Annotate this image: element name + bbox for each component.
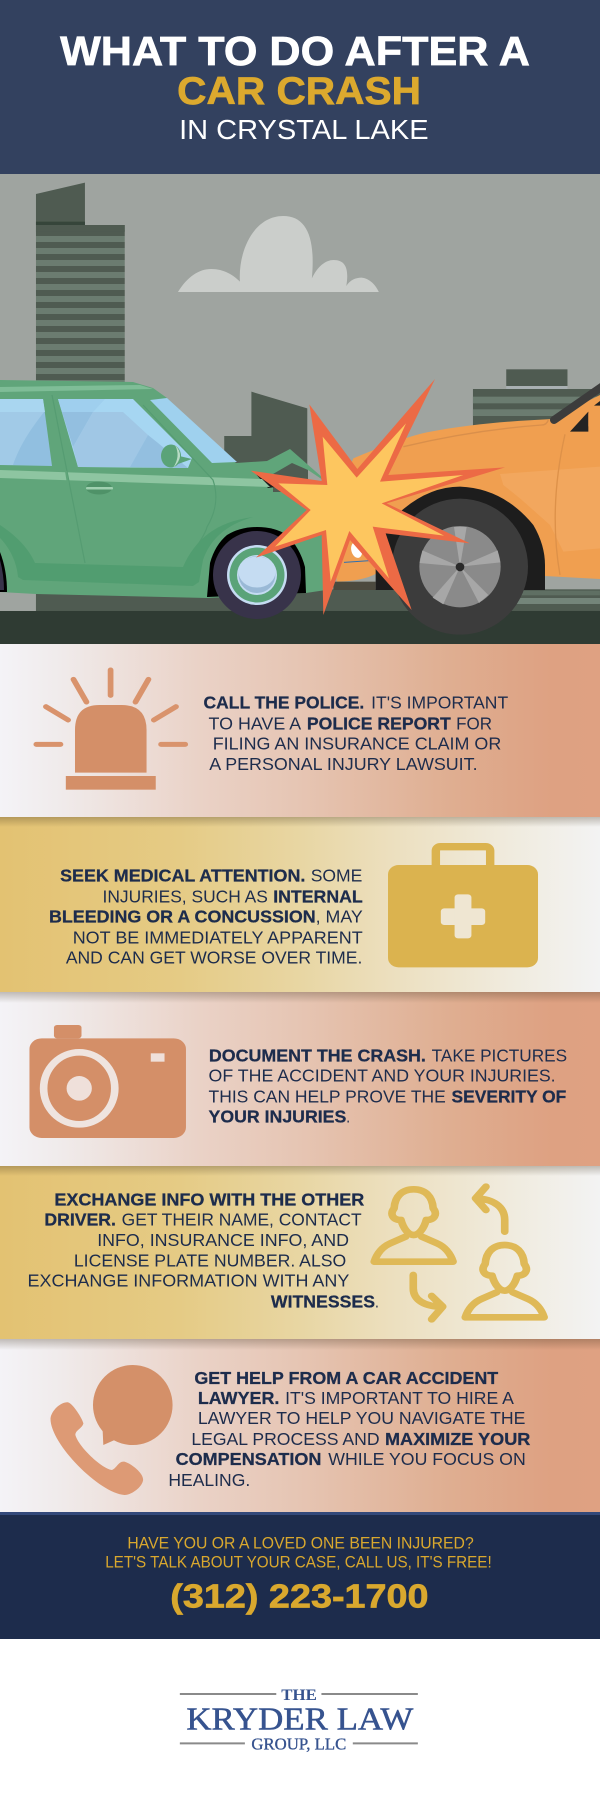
text: seek medical attention: INJURIES, SUCH AS <box>103 887 268 906</box>
green car windows <box>0 398 237 468</box>
text: call the police: IT'S IMPORTANT <box>371 693 508 712</box>
icon: first aid kit <box>388 847 538 967</box>
text: exchange info: EXCHANGE INFO WITH THE OTHER <box>54 1190 365 1209</box>
text: document the crash <box>209 1046 567 1126</box>
text: get help from a lawyer: COMPENSATION <box>176 1449 321 1469</box>
text: call the police: POLICE REPORT <box>307 714 451 733</box>
text: exchange info: INFO, INSURANCE INFO, AND <box>97 1230 349 1250</box>
logo: GROUP, LLC <box>251 1734 346 1753</box>
panel: document the crash <box>0 992 600 1166</box>
panel: seek medical attention <box>0 817 600 992</box>
crash illustration <box>0 174 600 644</box>
text: document the crash: YOUR INJURIES <box>209 1107 346 1126</box>
header panel <box>0 0 600 174</box>
text: exchange info: WITNESSES <box>271 1292 375 1311</box>
text: get help from a lawyer: HEALING. <box>168 1470 250 1490</box>
wheel: green car <box>213 531 301 619</box>
text: document the crash: . <box>346 1107 350 1126</box>
text: document the crash: DOCUMENT THE CRASH. <box>209 1046 426 1065</box>
text: exchange info: DRIVER. <box>44 1210 116 1229</box>
road <box>0 611 600 644</box>
footer call to action <box>0 1512 600 1639</box>
text: seek medical attention: SEEK MEDICAL ATTENTION. <box>60 866 305 885</box>
text: get help from a lawyer: LEGAL PROCESS AND <box>191 1429 380 1449</box>
text: exchange info: GET THEIR NAME, CONTACT <box>122 1210 362 1229</box>
wheel: orange car <box>392 499 528 635</box>
text: get help from a lawyer: GET HELP FROM A CAR ACCIDENT <box>194 1368 499 1388</box>
icon: two people exchanging <box>374 1187 544 1319</box>
green car door handle <box>86 482 113 494</box>
text: document the crash: OF THE ACCIDENT AND YOUR INJURIES. <box>209 1066 556 1085</box>
call to action text <box>105 1533 492 1571</box>
text: document the crash: THIS CAN HELP PROVE THE <box>209 1087 446 1106</box>
panel: call the police <box>0 644 600 817</box>
call to action text: HAVE YOU OR A LOVED ONE BEEN INJURED? <box>127 1533 474 1552</box>
icon: phone and speech bubble <box>51 1365 173 1495</box>
text: get help from a lawyer: WHILE YOU FOCUS ON <box>328 1449 526 1469</box>
text: get help from a lawyer: LAWYER. <box>198 1388 279 1408</box>
text: exchange info: . <box>375 1292 379 1311</box>
call to action text: LET'S TALK ABOUT YOUR CASE, CALL US, IT'S FREE! <box>105 1552 492 1571</box>
car: orange <box>333 386 600 635</box>
icon: siren <box>36 670 185 790</box>
text: seek medical attention: , MAY <box>316 907 363 926</box>
building centre <box>224 392 308 464</box>
title: IN CRYSTAL LAKE <box>179 115 429 146</box>
text: call the police: CALL THE POLICE. <box>204 693 364 712</box>
title: WHAT TO DO AFTER A <box>60 30 530 74</box>
text: get help from a lawyer <box>168 1368 531 1490</box>
logo <box>180 1686 418 1753</box>
text: get help from a lawyer: MAXIMIZE YOUR <box>385 1429 531 1449</box>
text: call the police: TO HAVE A <box>209 714 302 733</box>
green car belt line <box>0 470 270 487</box>
text: seek medical attention: SOME <box>311 866 362 885</box>
text: call the police: FOR <box>456 714 492 733</box>
title <box>60 30 530 146</box>
text: get help from a lawyer: LAWYER TO HELP YOU NAVIGATE THE <box>198 1408 525 1428</box>
text: seek medical attention: INTERNAL <box>273 887 363 906</box>
building right <box>473 369 600 429</box>
car: green <box>0 380 326 619</box>
text: exchange info: EXCHANGE INFORMATION WITH ANY <box>28 1271 350 1290</box>
text: seek medical attention: AND CAN GET WORSE OVER TIME. <box>66 948 362 967</box>
text: exchange info: LICENSE PLATE NUMBER. ALSO <box>74 1251 346 1270</box>
green car skirt <box>0 517 253 586</box>
logo: THE <box>281 1686 317 1704</box>
phone number: (312) 223-1700 <box>170 1578 429 1615</box>
text: seek medical attention: BLEEDING OR A CONCUSSION <box>49 907 316 926</box>
ground strip <box>36 589 600 611</box>
text: document the crash: SEVERITY OF <box>452 1087 566 1106</box>
logo: KRYDER LAW <box>186 1702 414 1737</box>
cloud <box>178 216 379 292</box>
text: seek medical attention <box>49 866 363 967</box>
explosion <box>251 379 505 615</box>
text: call the police: FILING AN INSURANCE CLAIM OR <box>213 734 501 753</box>
building left <box>36 182 125 382</box>
text: get help from a lawyer: IT'S IMPORTANT TO HIRE A <box>285 1388 514 1408</box>
text: exchange info <box>28 1190 379 1311</box>
icon: camera <box>29 1025 186 1138</box>
text: call the police: A PERSONAL INJURY LAWSUIT. <box>209 754 478 774</box>
title: CAR CRASH <box>177 69 421 112</box>
text: seek medical attention: NOT BE IMMEDIATELY APPARENT <box>73 928 363 947</box>
panel: exchange info <box>0 1166 600 1339</box>
green car mirror <box>161 444 192 468</box>
panel: get help from a lawyer <box>0 1339 600 1512</box>
text: call the police <box>204 693 508 774</box>
text: document the crash: TAKE PICTURES <box>432 1046 567 1065</box>
